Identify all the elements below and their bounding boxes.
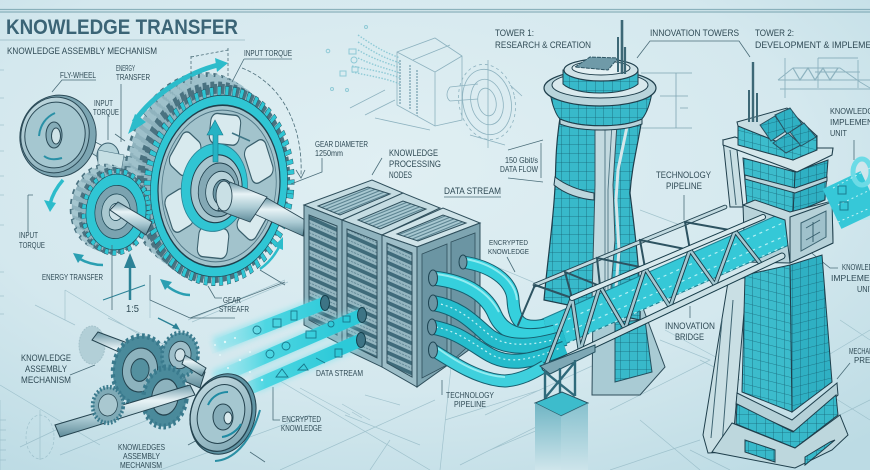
label: innovation bridge: BRIDGE: [675, 332, 704, 343]
tower 2 collar: [723, 137, 833, 172]
tower 2 upper and shaft: [703, 62, 848, 468]
upper axle: [92, 332, 205, 388]
gear B: [159, 330, 201, 380]
label: ratio: 1:5: [126, 303, 139, 315]
antennas: [618, 20, 625, 74]
small gear axle: [110, 202, 152, 235]
tower 1: [544, 20, 665, 395]
label: technology pipeline upper: PIPELINE: [666, 181, 702, 192]
label: tower 2: TOWER 2:: [755, 28, 794, 39]
label: technology pipeline upper: [656, 170, 712, 192]
gear C: [139, 365, 191, 429]
gear teeth side: [118, 70, 297, 285]
label: knowledges assembly mechanism: MECHANISM: [120, 460, 162, 470]
upper chord: [572, 217, 763, 298]
label: knowledge assembly mechanism left: ASSEMBLY: [25, 364, 68, 375]
double arrow: input torque: [44, 58, 283, 295]
center ratio arrows: [103, 253, 180, 330]
label: tower 1: [495, 28, 591, 51]
label: knowledges assembly mechanism: [118, 442, 165, 470]
antennas: [749, 62, 757, 122]
sketch: data stream dots and lines: [326, 26, 400, 92]
sketch: dimension marker: [641, 73, 692, 128]
label: gear diameter: GEAR DIAMETER: [315, 139, 368, 149]
tower 1 band: [554, 177, 594, 200]
small gear side: [68, 164, 150, 255]
tower 1 central column: [592, 124, 617, 300]
label: input torque left: INPUT: [19, 230, 38, 240]
label: knowledge implement unit right: [831, 262, 870, 294]
subtitle: KNOWLEDGE ASSEMBLY MECHANISM: [7, 46, 157, 57]
label: tower 1: TOWER 1:: [495, 28, 534, 39]
tower 2 upper strut: [723, 140, 743, 207]
label: gear diameter: 1250mm: [315, 148, 343, 158]
label: knowledges assembly mechanism: KNOWLEDGES: [118, 442, 165, 452]
inner arrow: [232, 133, 250, 141]
label: technology pipeline lower: [446, 390, 494, 409]
pipe collars: [428, 255, 467, 358]
data stream exiting tower: [832, 159, 870, 222]
label: data flow: [500, 155, 538, 174]
label: data flow: 150 Gbit/s: [505, 155, 538, 165]
label: knowledges assembly mechanism: ASSEMBLY: [123, 451, 160, 461]
opening behind bridge: [743, 205, 790, 263]
rack 2: [342, 193, 440, 367]
label: gear streafr: STREAFR: [219, 304, 249, 314]
shaft: [56, 127, 140, 178]
solar panels: [760, 108, 816, 153]
label: gear streafr: [219, 295, 249, 314]
label: data flow: DATA FLOW: [500, 164, 538, 174]
label: knowledge assembly mechanism left: MECHANISM: [21, 375, 71, 386]
tower 2 left strut lower: [703, 277, 747, 453]
tower 2 middle block: [793, 160, 828, 213]
bridge back chord: [535, 207, 725, 285]
label: energy transfer: [116, 63, 150, 82]
upper shaft and fly-wheel: [12, 88, 140, 184]
small gear face: [80, 168, 152, 256]
small gear D: [90, 385, 126, 425]
label: energy transfer: TRANSFER: [116, 72, 150, 82]
collar: [97, 143, 119, 169]
tower 1 back base: [592, 300, 665, 395]
upper axle tip: [182, 355, 206, 376]
label: tower 2: [755, 28, 870, 51]
pipe 1: [463, 262, 545, 326]
tower 2 base: [736, 383, 838, 432]
label: data stream lower: DATA STREAM: [316, 368, 363, 378]
server racks: [304, 180, 480, 387]
label: innovation towers: INNOVATION TOWERS: [650, 28, 739, 39]
label: input torque left: TORQUE: [19, 240, 45, 250]
sketch: server wireframe: [350, 38, 462, 130]
tower 2 roof: [737, 108, 817, 148]
label: encrypted knowledge lower: KNOWLEDGE: [281, 423, 322, 433]
label: input torque left: [19, 230, 45, 250]
label: tower 1: RESEARCH & CREATION: [495, 40, 591, 51]
pipe 5: [433, 350, 545, 381]
pipe 2: [433, 278, 555, 336]
solar panels: [575, 57, 618, 70]
tower 1 body: [544, 118, 642, 320]
label: knowledge processing nodes: [389, 148, 441, 181]
data flow tubes: [210, 296, 366, 388]
label: input torque top: INPUT TORQUE: [244, 48, 292, 58]
teal pipelines: [428, 222, 788, 381]
label: energy transfer lower: ENERGY TRANSFER: [42, 272, 103, 282]
pale flywheel: [79, 326, 105, 364]
label: input torque: TORQUE: [93, 107, 119, 117]
rack 3: [382, 208, 480, 387]
label: knowledge assembly mechanism left: KNOWLEDGE: [21, 353, 71, 364]
pipe 3: [433, 303, 565, 346]
sketch: bridge wireframe: [778, 58, 870, 98]
label: knowledge processing nodes: PROCESSING: [389, 159, 441, 170]
label: input torque: INPUT: [94, 98, 113, 108]
tower 2 shaft: [790, 255, 832, 412]
tower 2 gray block: [743, 200, 833, 263]
top bracing: [518, 222, 735, 325]
near truss: [545, 231, 760, 368]
label: knowledge processing nodes: NODES: [389, 170, 412, 181]
main shaft to servers: [216, 181, 305, 236]
gear face: [138, 84, 300, 288]
fly-wheel: [12, 88, 104, 184]
sketch: gear wireframe: [447, 59, 522, 148]
label: encrypted knowledge lower: [281, 414, 322, 433]
label: fly-wheel: FLY-WHEEL: [60, 70, 96, 80]
lower chord: [545, 256, 782, 368]
bridge stream: [530, 228, 788, 342]
label: data stream upper: DATA STREAM: [444, 186, 501, 196]
label: encrypted knowledge upper: [488, 238, 529, 256]
label: gear diameter: [315, 139, 368, 158]
label: innovation bridge: INNOVATION: [665, 321, 715, 332]
label: technology pipeline upper: TECHNOLOGY: [656, 170, 712, 181]
label: knowledge assembly mechanism left: [21, 353, 71, 386]
label: encrypted knowledge lower: ENCRYPTED: [282, 414, 321, 424]
lower gear assembly: [55, 326, 266, 463]
tower 1 cap: [544, 59, 656, 130]
label: technology pipeline lower: TECHNOLOGY: [446, 390, 494, 400]
label: energy transfer: ENERGY: [116, 63, 135, 73]
label: encrypted knowledge upper: KNOWLEDGE: [488, 247, 529, 256]
bridge pier: [535, 345, 595, 470]
large gear: [118, 70, 300, 288]
label: knowledge implement unit: UNIT: [830, 128, 847, 138]
label: technology pipeline lower: PIPELINE: [454, 399, 486, 409]
lower axle: [55, 385, 195, 437]
gear A: [109, 332, 171, 408]
label: input torque: [93, 98, 119, 117]
label: knowledge processing nodes: KNOWLEDGE: [389, 148, 438, 159]
upward arrow on gear: [207, 120, 223, 162]
pipe 4: [432, 327, 565, 361]
title: KNOWLEDGE TRANSFER: [6, 16, 238, 39]
label: innovation bridge: [665, 321, 715, 343]
lower fly-wheel: [180, 365, 266, 463]
innovation bridge: [518, 207, 782, 368]
label: encrypted knowledge upper: ENCRYPTED: [489, 238, 528, 247]
small gear: [68, 164, 152, 256]
label: mechanism precision: [849, 346, 870, 365]
label: knowledge implement unit: [830, 106, 870, 138]
small arrows: [50, 180, 63, 204]
rack 1: [304, 180, 403, 345]
tower 2 top band: [738, 126, 817, 160]
tower 1 side rib: [615, 122, 628, 300]
circuit plate: [801, 211, 826, 251]
label: gear streafr: GEAR: [223, 295, 241, 305]
